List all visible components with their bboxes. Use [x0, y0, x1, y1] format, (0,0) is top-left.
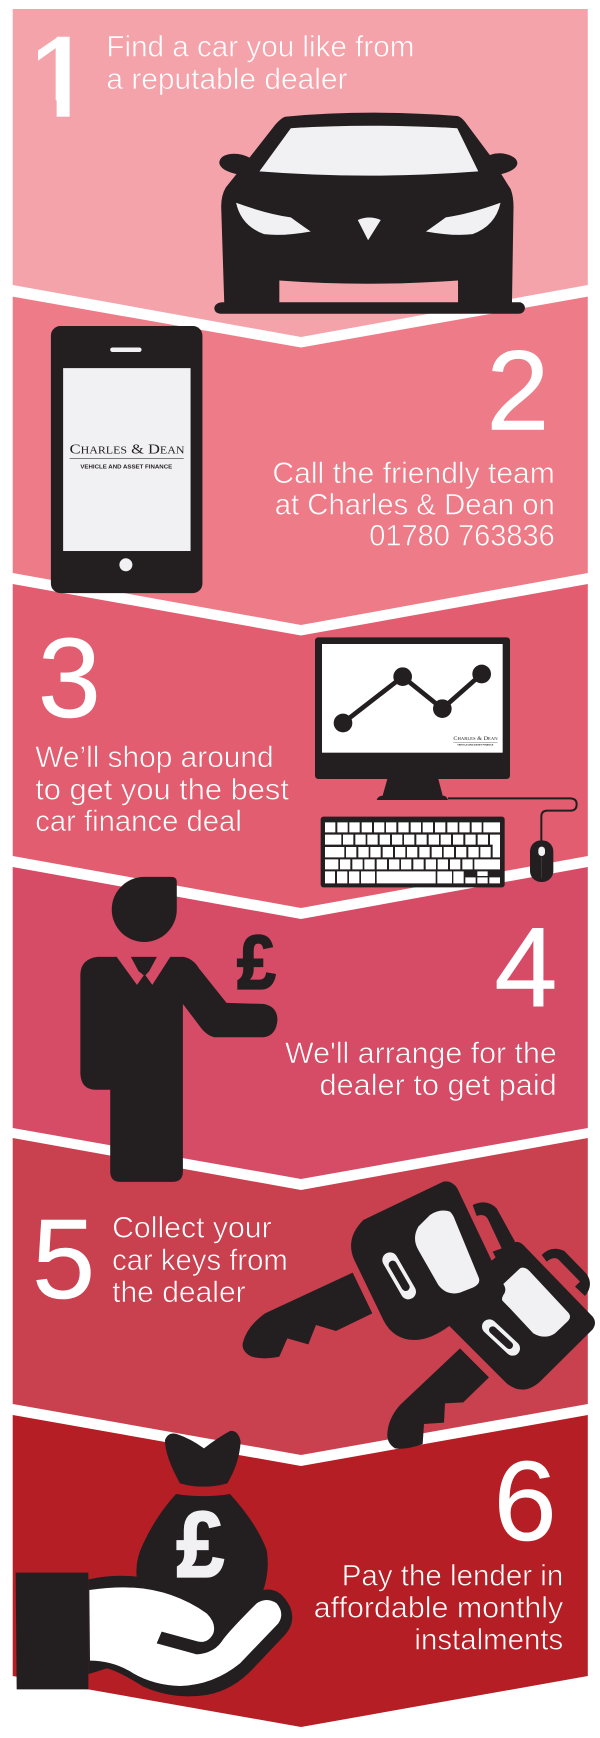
text: step 2: 01780 763836 — [369, 520, 555, 553]
logo: Charles & Dean on monitor: Charles & Dean — [453, 736, 498, 742]
icon: man holding pound — [80, 877, 277, 1182]
panel: step 3 background — [13, 584, 588, 908]
number 1: 1 — [28, 14, 91, 141]
step 1 content — [28, 14, 555, 593]
text: step 6 — [314, 1560, 563, 1657]
text: step 1: Find a car you like from — [106, 31, 414, 64]
text: step 5: car keys from — [112, 1244, 288, 1277]
text: step 3: car finance deal — [35, 805, 242, 838]
text: step 2: Call the friendly team — [272, 457, 555, 490]
line chart — [334, 665, 491, 732]
text: step 2 — [272, 457, 555, 553]
logo: Charles & Dean on phone: Charles & Dean — [70, 441, 184, 456]
icon: smartphone — [51, 326, 202, 593]
text: step 4 — [285, 1037, 557, 1102]
icon: computer with keyboard and mouse — [315, 637, 577, 887]
text: step 6: instalments — [414, 1624, 563, 1657]
text: step 3 — [35, 741, 290, 838]
key handles — [473, 1202, 590, 1296]
logo: Charles & Dean on monitor: VEHICLE AND ASSET FINANCE — [457, 744, 494, 747]
step 5 content — [32, 1196, 288, 1323]
number 2: 2 — [486, 328, 549, 455]
panel: step 4 background — [13, 867, 588, 1179]
number 6: 6 — [494, 1438, 557, 1565]
logo: Charles & Dean on phone: VEHICLE AND ASSET FINANCE — [80, 464, 173, 470]
text: step 4: We'll arrange for the — [285, 1037, 557, 1070]
icon: pair of car keys — [243, 1181, 595, 1449]
key blades — [243, 1273, 489, 1449]
text: step 5 — [112, 1211, 288, 1309]
text: step 5: Collect your — [112, 1211, 272, 1244]
step 3 and 4 content — [35, 615, 557, 1182]
mouse cable and mouse — [448, 798, 577, 882]
hand — [16, 1573, 292, 1696]
text: step 1 — [106, 31, 414, 96]
text: step 6: Pay the lender in — [342, 1560, 563, 1593]
text: step 1: a reputable dealer — [106, 63, 348, 96]
number 5: 5 — [32, 1196, 95, 1323]
logo: Charles & Dean on monitor — [453, 736, 498, 747]
pound symbol on bag: £ — [177, 1493, 224, 1597]
monitor — [315, 637, 510, 800]
text: step 6: affordable monthly — [314, 1591, 563, 1624]
number 4: 4 — [494, 904, 557, 1031]
step 6 text content — [314, 1438, 563, 1657]
text: step 2: at Charles & Dean on — [275, 488, 555, 521]
icon: hand holding money bag — [16, 1431, 292, 1696]
number 1 — [38, 36, 70, 117]
text: step 3: We’ll shop around — [35, 741, 274, 774]
logo: Charles & Dean on phone — [70, 441, 184, 470]
panel: step 2 background — [13, 297, 588, 625]
money bag — [136, 1431, 268, 1620]
pound symbol: £ — [237, 921, 276, 1006]
text: step 4: dealer to get paid — [320, 1069, 557, 1102]
panel: step 5 background — [13, 1138, 588, 1455]
text: step 5: the dealer — [112, 1276, 246, 1309]
number 3: 3 — [38, 615, 101, 742]
panel: step 6 background — [13, 1415, 588, 1727]
text: step 3: to get you the best — [35, 773, 290, 806]
panel: step 1 background — [13, 9, 588, 337]
key heads — [351, 1181, 595, 1390]
keyboard — [321, 817, 505, 887]
icon: car front — [214, 113, 525, 314]
